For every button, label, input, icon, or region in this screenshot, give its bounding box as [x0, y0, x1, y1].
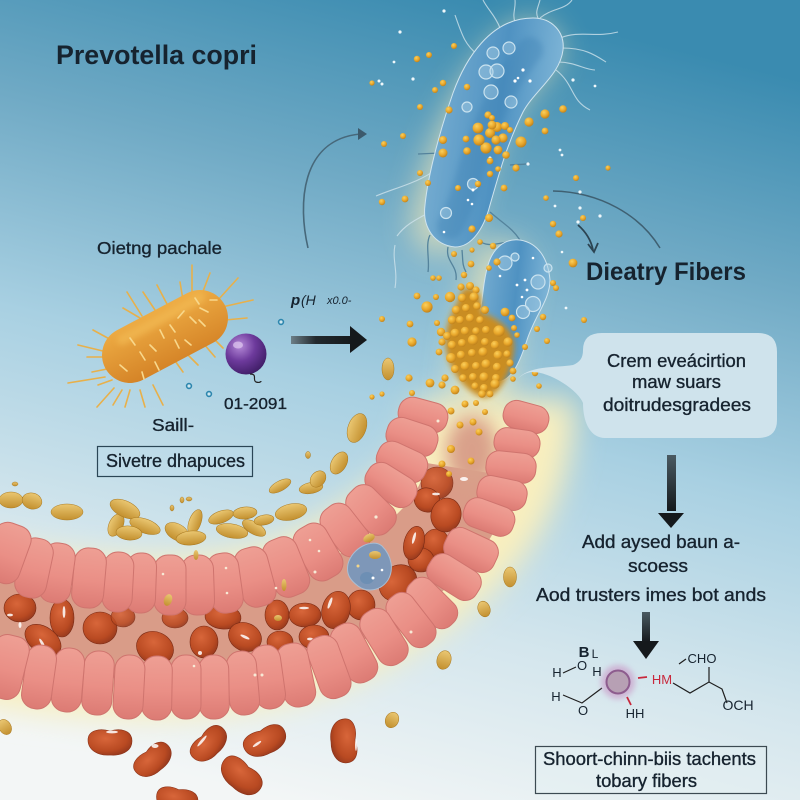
- small blue dots: [187, 320, 283, 396]
- intestine glow: [0, 400, 495, 638]
- bubbles: [498, 253, 552, 318]
- bubbles: [440, 42, 517, 218]
- atom labels: OCH: [722, 697, 754, 713]
- bacteria glow: [440, 50, 530, 400]
- red bonds: [627, 677, 647, 705]
- cell body: [474, 240, 550, 382]
- label: pH: (H: [301, 292, 317, 308]
- orange bacterium: [68, 265, 253, 407]
- upper tube segments: [0, 394, 451, 616]
- label: pH: [290, 292, 352, 309]
- large blue bacterium: [376, 0, 618, 288]
- label: pH: p: [290, 292, 300, 309]
- boxed label: short-chain fatty acids: [536, 746, 766, 794]
- atom labels: HM: [652, 672, 672, 687]
- label: Saill-: Saill-: [152, 415, 194, 435]
- boxed label: short-chain fatty acids: tobary fibers: [596, 771, 697, 791]
- grains on tube: [162, 532, 376, 621]
- text: Add aysed baun: [582, 531, 740, 576]
- label: 01-2091: 01-2091: [224, 396, 287, 413]
- scattered white specks: [378, 9, 602, 309]
- atom labels: L: [592, 647, 599, 661]
- atom labels: B: [579, 644, 590, 661]
- text: Add aysed baun: Add aysed baun a-: [582, 531, 740, 552]
- gold granules in lumen: [438, 400, 488, 477]
- callout: doitrudesgradees: [603, 395, 751, 415]
- small blue bacterium: [474, 240, 552, 382]
- curved line and arrow: dietary fibers: [553, 191, 660, 252]
- cell body: [425, 18, 563, 247]
- text: Aod trusters: Aod trusters imes bot ands: [536, 584, 766, 605]
- flagella: [376, 0, 618, 288]
- granules: [434, 282, 520, 398]
- callout: [517, 333, 777, 438]
- intestine: [0, 394, 552, 720]
- lumen fading top: [446, 416, 498, 488]
- body: [130, 318, 200, 355]
- atom labels: H: [551, 689, 561, 704]
- bean highlights: [7, 477, 468, 665]
- beans in lumen: [4, 467, 465, 671]
- callout: Crem eveácirtion: [607, 351, 746, 371]
- translucent cell: [347, 543, 391, 590]
- purple molecule: [226, 334, 266, 382]
- cluster shadow: [445, 288, 514, 398]
- arrow: to bacteria: [291, 326, 367, 353]
- arrow: down to molecule: [633, 612, 659, 659]
- curved arrow: upper left: [303, 128, 367, 248]
- chemical structure: [551, 644, 754, 721]
- surface hairs: [120, 298, 217, 379]
- callout: maw suars: [632, 372, 721, 392]
- atom labels: HH: [626, 706, 644, 721]
- lower tube segments: [0, 398, 552, 720]
- atom labels: CHO: [688, 651, 716, 666]
- bonds: [563, 659, 727, 703]
- body highlight: [122, 298, 200, 340]
- kidney beans below intestine: [88, 718, 358, 800]
- hairs: [68, 265, 253, 407]
- white specks: [499, 257, 534, 298]
- specks on tube: [162, 420, 439, 676]
- glowing atom: [601, 665, 635, 699]
- arrow: down from callout: [658, 455, 684, 528]
- gold granules scattered: [369, 43, 611, 400]
- heading: Dietary fibers: Dieatry Fibers: [586, 258, 746, 286]
- white specks: [443, 68, 532, 233]
- atom labels: O: [578, 703, 588, 718]
- lumen: [0, 470, 470, 635]
- label: Oietng pachale: Oietng pachale: [97, 238, 222, 258]
- boxed label: Sivetre dhapuces: [98, 446, 252, 476]
- cell shading: [450, 50, 530, 226]
- atom labels: O: [577, 658, 587, 673]
- text: Add aysed baun: scoess: [628, 555, 688, 576]
- gold cluster on large bacterium: [463, 111, 513, 187]
- boxed label: short-chain fatty acids: Shoort-chinn-biis tachents: [543, 749, 756, 769]
- gold cluster lower: [434, 282, 520, 398]
- label: pH: x0.0-: [326, 295, 352, 307]
- title: Prevotella copri: [56, 40, 257, 70]
- atom labels: H: [552, 665, 562, 680]
- boxed label: Sivetre dhapuces: Sivetre dhapuces: [106, 450, 245, 471]
- lower-side flagella: [418, 153, 530, 280]
- grains and seeds: [0, 358, 517, 737]
- atom labels: H: [592, 664, 602, 679]
- atom labels: [551, 644, 754, 721]
